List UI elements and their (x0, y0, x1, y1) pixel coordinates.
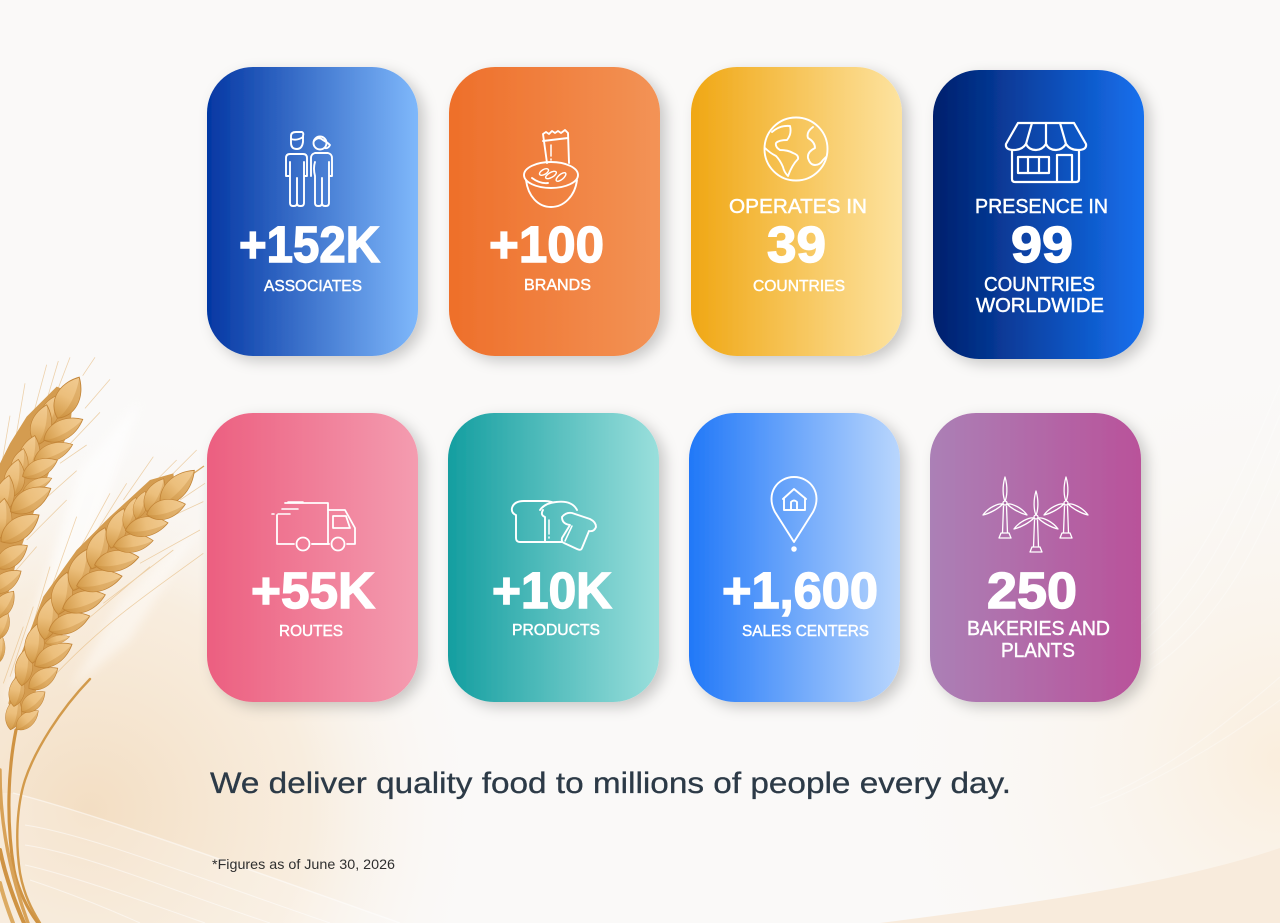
value: +100 (489, 216, 604, 273)
label: BRANDS (524, 277, 591, 294)
label: BAKERIES AND (967, 618, 1110, 640)
card background (207, 413, 418, 702)
heading: PRESENCE IN (975, 196, 1108, 218)
card background (689, 413, 900, 702)
panel: presence in (933, 70, 1144, 359)
label: ASSOCIATES (264, 278, 362, 295)
icon: bread bowl and bar (524, 130, 578, 207)
footnote: *Figures as of June 30, 2026 (212, 856, 395, 872)
panel: sales centers (689, 413, 900, 702)
icon: store (1006, 123, 1086, 182)
label: COUNTRIES (984, 274, 1095, 296)
wheat ear: right (3, 463, 204, 735)
value: +152K (239, 216, 380, 273)
wheat ear: left (0, 372, 89, 664)
heading: OPERATES IN (729, 196, 867, 218)
label: COUNTRIES (753, 278, 845, 295)
label: PLANTS (1001, 640, 1075, 662)
card background (930, 413, 1141, 702)
wheat awns (0, 357, 205, 683)
tagline: We deliver quality food to millions of people every day. (210, 767, 1011, 800)
icon: delivery truck (272, 502, 355, 550)
panel: operates in (691, 67, 902, 356)
panel: routes (207, 413, 418, 702)
card background (449, 67, 660, 356)
card background (448, 413, 659, 702)
value: 39 (767, 216, 826, 273)
value: +10K (492, 562, 612, 619)
card background (207, 67, 418, 356)
label: WORLDWIDE (976, 295, 1104, 317)
icon: location pin with house (771, 477, 817, 551)
value: +1,600 (722, 562, 878, 619)
icon: bread slices (512, 501, 596, 550)
value: +55K (251, 562, 375, 619)
label: PRODUCTS (512, 622, 600, 639)
value: 250 (987, 562, 1077, 619)
value: 99 (1011, 216, 1073, 273)
card background (933, 70, 1144, 359)
label: SALES CENTERS (742, 623, 869, 640)
wheat stems (0, 679, 90, 923)
icon: people (286, 132, 332, 206)
panel: brands (449, 67, 660, 356)
wheat illustration (0, 357, 205, 923)
icon: globe (764, 118, 828, 180)
panel: associates (207, 67, 418, 356)
icon: wind turbines (983, 477, 1088, 552)
label: ROUTES (279, 623, 343, 640)
card background (691, 67, 902, 356)
panel: products (448, 413, 659, 702)
panel: bakeries and plants (930, 413, 1141, 702)
